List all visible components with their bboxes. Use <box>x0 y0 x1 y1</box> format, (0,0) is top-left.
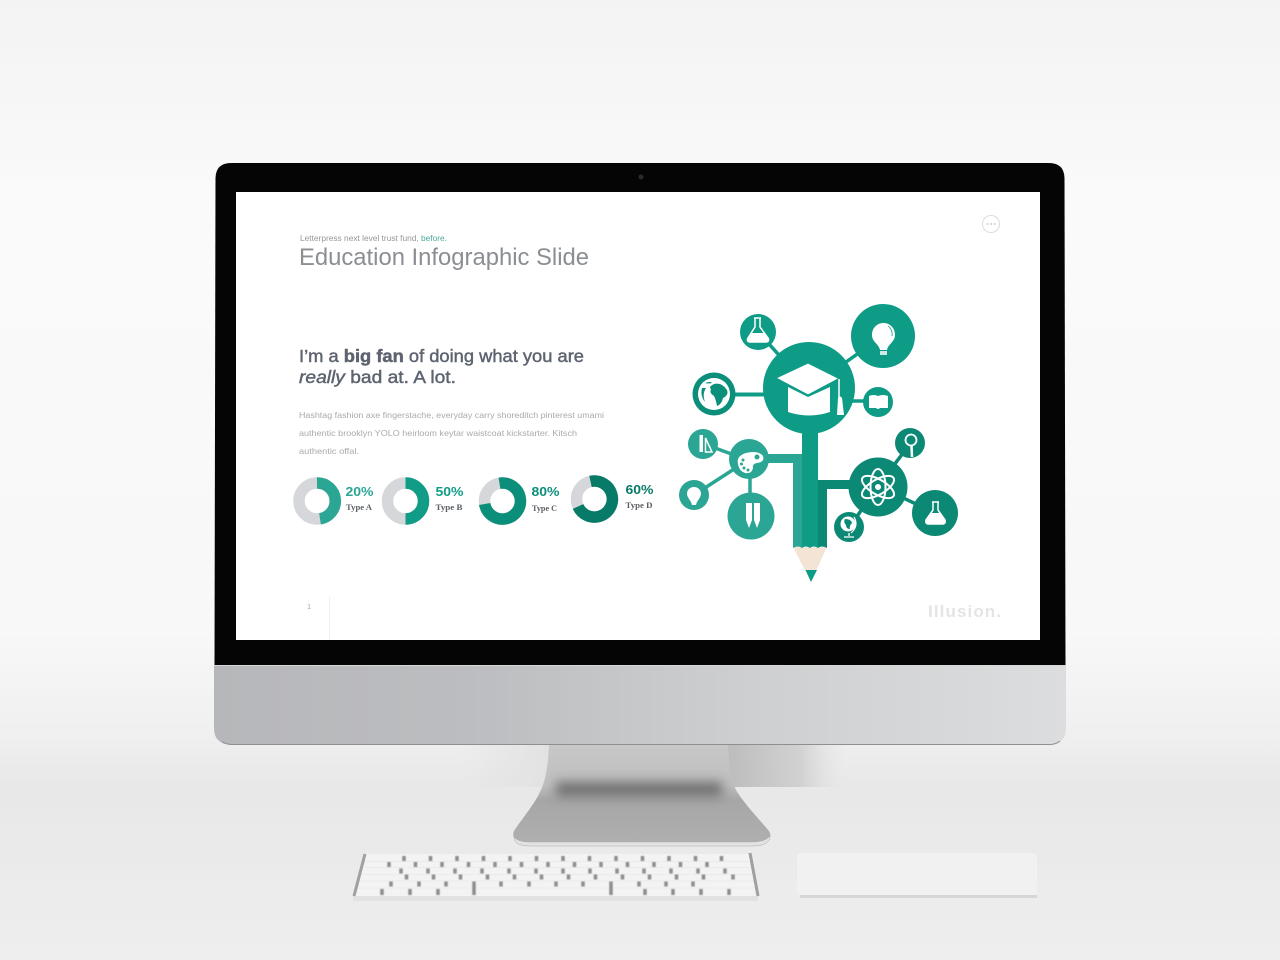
heading: really bad at. A lot. <box>299 367 456 387</box>
body text <box>299 410 604 456</box>
donut chart: Type A 20%: Type A <box>346 503 372 512</box>
body text: Hashtag fashion axe fingerstache, everyday carry shoreditch pinterest umami <box>299 410 604 420</box>
donut chart: Type C 80%: 80% <box>532 484 560 499</box>
atom node <box>848 458 908 516</box>
book node <box>863 387 893 417</box>
donut chart: Type A 20% <box>299 483 374 519</box>
subtitle: Letterpress next level trust fund, before. <box>300 233 447 243</box>
donut chart: Type D 60%: Type D <box>626 501 653 510</box>
slide footer <box>307 597 1001 640</box>
connectors <box>694 332 935 528</box>
body text: authentic offal. <box>299 446 359 456</box>
page number: 1 <box>307 602 311 611</box>
donut chart: Type C 80% <box>484 483 560 519</box>
donut chart: Type B 50% <box>388 483 464 519</box>
flask node right <box>912 490 958 536</box>
donut chart: Type D 60%: 60% <box>626 482 654 497</box>
donut chart: Type B 50%: Type B <box>436 503 463 512</box>
flask node <box>740 314 776 350</box>
chin bottom edge <box>222 741 1060 744</box>
donut chart: Type C 80%: Type C <box>532 504 557 513</box>
ruler node <box>688 429 718 459</box>
monitor bezel <box>214 163 1066 665</box>
globe node <box>692 372 736 416</box>
light bulb node <box>851 304 915 368</box>
heading: I’m a big fan of doing what you are <box>299 346 584 366</box>
trackpad <box>797 853 1037 898</box>
right branch <box>818 480 868 489</box>
title: Education Infographic Slide <box>299 244 589 271</box>
pencil tip <box>793 546 827 582</box>
donut chart: Type A 20%: 20% <box>346 484 374 499</box>
screen <box>236 192 1040 640</box>
magnifier node <box>895 428 925 458</box>
monitor chin <box>214 665 1066 744</box>
chin top edge <box>214 665 1066 666</box>
donut chart: Type D 60% <box>576 481 654 517</box>
monitor stand <box>513 745 770 843</box>
heading <box>299 346 584 387</box>
graduation cap node <box>763 342 855 434</box>
small bulb node <box>679 480 709 510</box>
keyboard <box>353 853 758 901</box>
stand shadow band <box>556 782 722 796</box>
desk globe node <box>834 512 864 542</box>
palette node <box>729 439 769 479</box>
pencil lead <box>806 570 817 582</box>
slide header <box>299 233 589 271</box>
stand base highlight <box>514 836 770 846</box>
monitor <box>214 163 1066 846</box>
left branch <box>748 454 794 463</box>
brand: Illusion. <box>928 602 1001 621</box>
body text: authentic brooklyn YOLO heirloom keytar waistcoat kickstarter. Kitsch <box>299 428 577 438</box>
donut chart: Type B 50%: 50% <box>436 484 464 499</box>
pens node <box>728 492 774 540</box>
pencil body <box>793 454 802 548</box>
education tree illustration <box>679 304 958 582</box>
webcam <box>638 174 644 180</box>
menu icon <box>982 216 1000 232</box>
